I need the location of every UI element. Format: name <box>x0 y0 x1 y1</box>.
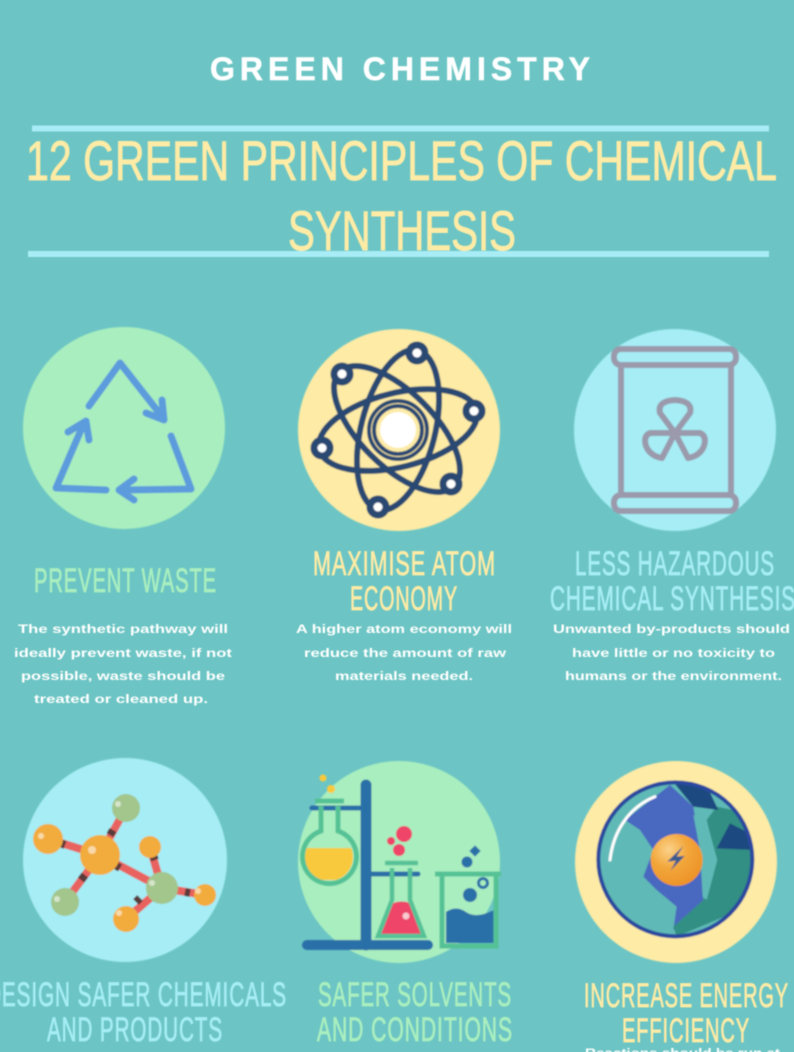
heading: AND PRODUCTS <box>47 1011 223 1049</box>
body text: ideally prevent waste, if not <box>14 648 232 660</box>
icon: hazard barrel <box>574 329 776 531</box>
body text: have little or no toxicity to <box>572 648 775 660</box>
body text: materials needed. <box>335 671 473 683</box>
panel: less hazardous chemical synthesis <box>550 329 794 683</box>
body text: A higher atom economy will <box>296 624 512 636</box>
icon: atom <box>298 329 500 531</box>
panel: prevent waste <box>14 327 232 706</box>
heading <box>550 545 794 618</box>
yellow flask <box>304 847 354 881</box>
icon: energy globe <box>575 761 777 963</box>
panel: design safer chemicals and products <box>0 758 287 1049</box>
body text: possible, waste should be <box>21 671 225 683</box>
panel: safer solvents and conditions <box>298 761 513 1049</box>
body text <box>553 624 790 683</box>
stand <box>307 785 428 945</box>
heading <box>0 976 287 1049</box>
heading <box>317 976 513 1049</box>
heading <box>584 977 789 1050</box>
bottom rule <box>28 251 769 257</box>
body text: treated or cleaned up. <box>34 694 208 706</box>
panel: maximise atom economy <box>296 329 512 683</box>
heading: ECONOMY <box>350 580 458 618</box>
header <box>26 51 777 262</box>
body text: Unwanted by-products should <box>553 624 790 636</box>
body text: The synthetic pathway will <box>18 624 228 636</box>
heading: AND CONDITIONS <box>317 1011 513 1049</box>
body text <box>14 624 232 706</box>
icon: recycling arrows <box>23 327 225 529</box>
main title <box>26 129 777 262</box>
eyebrow title: GREEN CHEMISTRY <box>210 51 590 87</box>
heading: DESIGN SAFER CHEMICALS <box>0 976 287 1014</box>
heading: PREVENT WASTE <box>34 562 217 600</box>
panel: increase energy efficiency <box>575 761 789 1052</box>
main title: SYNTHESIS <box>288 199 516 262</box>
heading <box>313 545 496 618</box>
heading: MAXIMISE ATOM <box>313 545 496 583</box>
blue beaker <box>446 908 494 943</box>
icon: molecule <box>23 758 227 962</box>
red flask <box>379 902 422 934</box>
icon: lab glassware <box>298 761 501 963</box>
body text: humans or the environment. <box>565 671 782 683</box>
body text: reduce the amount of raw <box>304 648 506 660</box>
heading: SAFER SOLVENTS <box>318 976 512 1014</box>
top rule <box>32 126 769 132</box>
body text <box>296 624 512 683</box>
